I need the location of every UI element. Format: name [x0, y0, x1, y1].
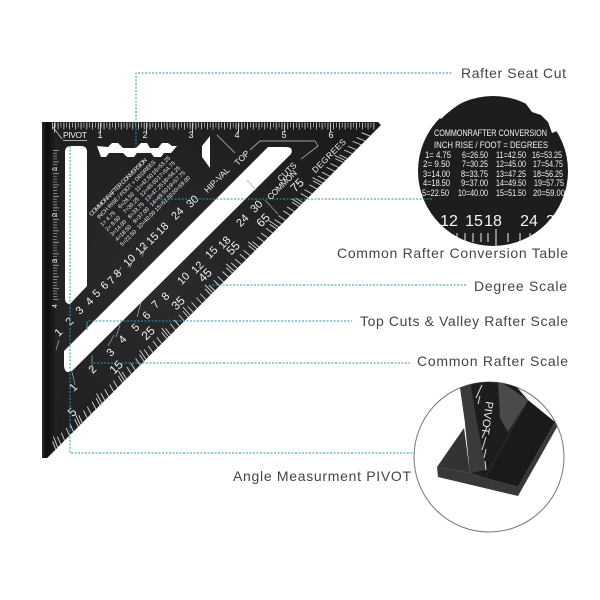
lens table text: 20=59.00 — [533, 188, 565, 199]
common rafter scale numbers: 15 — [203, 244, 220, 261]
top cuts rafter scale numbers: 24 — [169, 205, 186, 222]
lens scale numbers and ticks: 30 — [546, 213, 564, 230]
rotated conversion table on square: 2= 9.50 — [105, 215, 122, 233]
rotated conversion table on square: INCH RISE / FOOT = DEGREES — [96, 160, 157, 221]
common rafter scale numbers: 4 — [116, 333, 129, 346]
hip-val and rafter scale captions: COMMON — [265, 168, 299, 202]
common rafter scale numbers: 6 — [140, 309, 153, 322]
lens table text: 17=54.75 — [533, 159, 563, 170]
lens table text: 3=14.00 — [423, 169, 450, 180]
top inch numbers: 5 — [281, 130, 287, 140]
hip-val slot — [202, 136, 210, 168]
leader line: common rafter scale — [92, 363, 410, 372]
diagonal slot — [64, 147, 292, 372]
lens scale numbers and ticks: 18 — [484, 213, 502, 230]
leader line: conversion table — [157, 198, 433, 200]
hypotenuse degree ticks — [52, 132, 370, 450]
top inch numbers: 6 — [328, 130, 334, 140]
lens table text: 4=18.50 — [423, 178, 450, 189]
flange and blade: PIVOT — [478, 401, 495, 435]
label: common rafter conversion table: Common Rafter Conversion Table — [337, 245, 568, 261]
lens table text: COMMONRAFTER CONVERSION — [434, 128, 547, 139]
lens table text: 1= 4.75 — [425, 150, 451, 161]
lens table text: 15=51.50 — [496, 188, 526, 199]
rotated conversion table on square: 8=33.75 — [127, 202, 146, 220]
common rafter scale numbers: 1 — [67, 381, 80, 394]
hip-val and rafter scale captions — [202, 137, 348, 202]
top inch numbers — [97, 130, 334, 140]
scale tick lines — [56, 180, 278, 385]
top cuts rafter scale numbers: 5 — [90, 287, 103, 300]
rafter seat cut notch — [97, 143, 177, 157]
lens scale numbers and ticks: 24 — [520, 213, 538, 230]
top cuts rafter scale numbers: 8 — [111, 267, 124, 280]
lens table text: 7=30.25 — [462, 159, 488, 170]
common rafter scale numbers: 10 — [175, 270, 192, 287]
label: rafter seat cut: Rafter Seat Cut — [461, 65, 566, 81]
top inch numbers: 2 — [142, 130, 148, 140]
left inch numbers — [52, 167, 59, 308]
top inch numbers: 1 — [97, 130, 103, 140]
left inch numbers: 4 — [52, 304, 59, 308]
common rafter scale numbers: 5 — [129, 321, 142, 334]
rotated conversion table on square: COMMONRAFTER CONVERSION — [89, 158, 149, 218]
rotated conversion table on square: 3=14.00 — [110, 219, 128, 238]
top cuts rafter scale numbers: 18 — [154, 220, 171, 237]
rotated conversion table on square: 12=45.00 — [139, 177, 160, 198]
label: top cuts and valley rafter scale: Top Cuts & Valley Rafter Scale — [360, 313, 568, 329]
flange and blade — [437, 376, 557, 496]
top cuts rafter scale numbers: 6 — [98, 279, 111, 292]
lens table text: 11=42.50 — [496, 150, 526, 161]
lens highlights — [440, 100, 557, 133]
hip-val and rafter scale captions: HIP-VAL — [202, 165, 232, 195]
top cuts rafter scale numbers: 7 — [105, 274, 118, 287]
top cuts rafter scale numbers: 4 — [83, 295, 96, 308]
top cuts rafter scale numbers: 10 — [121, 252, 138, 269]
lens table text: 2= 9.50 — [423, 159, 450, 170]
lens table text — [422, 128, 565, 199]
top cuts rafter scale numbers: 30 — [184, 193, 201, 210]
lens scale numbers and ticks: 15 — [465, 213, 483, 230]
hip-val and rafter scale captions: CUTS — [275, 160, 299, 184]
common rafter scale numbers: 30 — [248, 198, 265, 215]
top inch numbers: 3 — [188, 130, 194, 140]
top cuts rafter scale numbers — [52, 193, 201, 339]
rotated conversion table on square: 11=42.50 — [134, 173, 155, 193]
degree scale numbers: 75 — [287, 175, 307, 195]
rotated conversion table on square: 1= 4.75 — [100, 210, 117, 228]
top cuts rafter scale numbers: 1 — [52, 326, 65, 339]
rotated conversion table on square: 16=53.25 — [151, 156, 172, 176]
leader line: rafter seat cut — [136, 73, 453, 148]
label: angle measurement pivot: Angle Measurment PIVOT — [233, 468, 411, 484]
left inch numbers: 2 — [52, 213, 59, 217]
common rafter scale numbers: 8 — [159, 290, 172, 303]
label: common rafter scale: Common Rafter Scale — [417, 353, 568, 369]
leader line: pivot — [70, 146, 415, 453]
left inch numbers: 1 — [52, 167, 59, 171]
common rafter scale numbers: 24 — [234, 212, 251, 229]
rotated conversion table on square: 14=49.50 — [149, 187, 170, 208]
pivot label — [53, 127, 87, 140]
rotated conversion table on square: 4=18.50 — [114, 224, 133, 243]
lens scale numbers and ticks — [441, 215, 553, 246]
top cuts rafter scale numbers: 2 — [63, 315, 76, 328]
lens table text: 9=37.00 — [461, 178, 488, 189]
lens table text: 14=49.50 — [496, 178, 526, 189]
degree scale numbers: 15 — [106, 357, 126, 377]
left flange — [42, 122, 57, 458]
rotated conversion table on square: 17=54.75 — [156, 160, 177, 181]
callout lens: pivot edge closeup — [414, 376, 564, 532]
lens scale numbers and ticks: 12 — [440, 213, 458, 230]
vertical slot — [65, 146, 87, 304]
lens table text: 6=26.50 — [462, 150, 488, 161]
rotated conversion table on square: 15=51.50 — [154, 192, 175, 213]
rotated conversion table on square — [89, 145, 192, 248]
degree scale numbers: 5 — [65, 405, 80, 419]
common rafter scale numbers: 12 — [189, 259, 206, 276]
top inch ruler ticks — [52, 125, 376, 128]
rotated conversion table on square: 5=22.50 — [119, 229, 138, 248]
degree scale numbers — [65, 175, 307, 419]
rotated conversion table on square: 9=37.00 — [132, 207, 151, 225]
callout lens: conversion table closeup — [418, 96, 568, 246]
left inch numbers: 3 — [52, 259, 59, 263]
lens table text: 5=22.50 — [422, 188, 449, 199]
rotated conversion table on square: 7=30.25 — [122, 197, 141, 215]
common rafter scale numbers: 18 — [216, 234, 233, 251]
top cuts rafter scale numbers: 3 — [73, 304, 86, 317]
leader line: degree scale — [212, 284, 467, 286]
rotated conversion table on square: 19=57.75 — [166, 170, 187, 191]
lens table text: 19=57.75 — [534, 178, 564, 189]
top inch numbers: 4 — [234, 130, 240, 140]
leader line: top cuts scale — [87, 321, 352, 330]
pivot label: PIVOT — [63, 130, 87, 140]
hip-val and rafter scale captions: TOP — [232, 148, 252, 168]
degree scale numbers: 25 — [138, 323, 158, 343]
lens table text: 18=56.25 — [533, 169, 563, 180]
degree scale numbers: 65 — [253, 210, 273, 230]
lens table text: 16=53.25 — [532, 150, 562, 161]
rotated conversion table on square: 6=26.50 — [117, 192, 136, 210]
top and common cuts guide line — [217, 135, 318, 159]
lens table text: 10=40.00 — [458, 188, 488, 199]
lens table text: 8=33.75 — [461, 169, 488, 180]
lens table text: 13=47.25 — [496, 169, 526, 180]
square body — [42, 122, 381, 458]
lens table text: INCH RISE / FOOT = DEGREES — [434, 140, 548, 151]
hip-val and rafter scale captions: DEGREES — [310, 137, 348, 175]
degree scale numbers: 45 — [195, 265, 215, 285]
rotated conversion table on square: 13=47.25 — [144, 182, 165, 203]
left ruler ticks — [55, 150, 56, 300]
top cuts rafter scale numbers: 12 — [133, 240, 150, 257]
rotated conversion table on square: 18=56.25 — [161, 165, 182, 186]
top cuts rafter scale numbers: 15 — [144, 230, 161, 247]
rafter square tool — [42, 122, 381, 458]
common rafter scale numbers: 3 — [104, 346, 117, 359]
common rafter scale numbers — [67, 198, 265, 394]
label: degree scale: Degree Scale — [474, 278, 567, 294]
degree scale numbers: 35 — [168, 293, 188, 313]
rotated conversion table on square: 20=59.00 — [171, 175, 192, 196]
common rafter scale numbers: 2 — [86, 363, 99, 376]
degree scale numbers: 55 — [223, 238, 243, 258]
common rafter scale numbers: 7 — [149, 298, 162, 311]
rotated conversion table on square: 10=40.00 — [136, 210, 157, 231]
lens table text: 12=45.00 — [496, 159, 526, 170]
